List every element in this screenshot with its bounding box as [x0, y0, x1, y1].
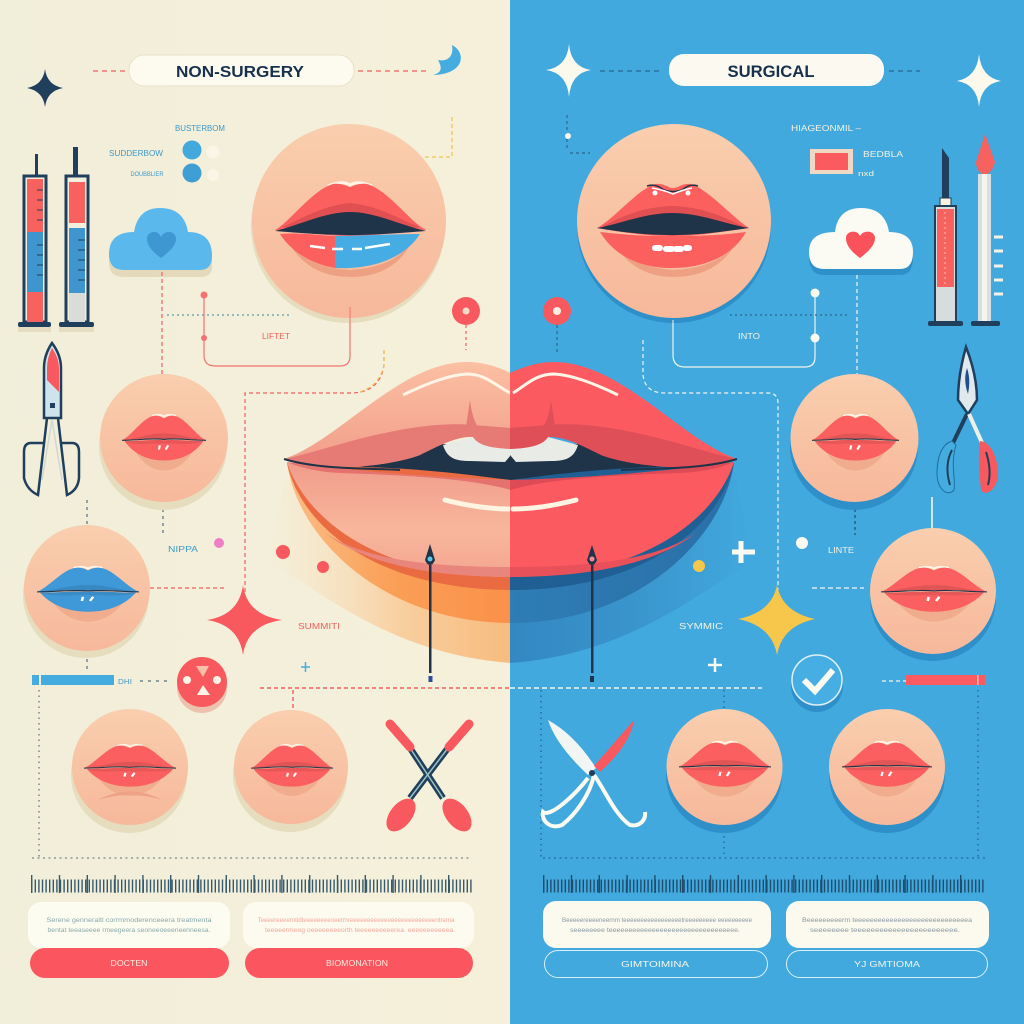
icon: crossed clamps left — [381, 724, 477, 837]
legend: non-surgery — [109, 124, 225, 182]
icon: yellow star right — [738, 585, 815, 655]
icon: blue cloud with heart — [109, 208, 212, 277]
button: non-surgery 1: DOCTEN — [110, 959, 148, 968]
scalpel: right — [971, 134, 1003, 326]
lips circle: bottom left 2 — [233, 710, 348, 832]
connectors: non-surgery — [39, 117, 510, 858]
legend: surgical: HIAGEONMIL – — [791, 124, 862, 133]
ruler: non-surgery — [31, 858, 472, 886]
legend: surgical: nxd — [858, 171, 874, 178]
button: surgical 2: YJ GMTIOMA — [854, 960, 921, 969]
card: non-surgery 2: Teeeereeeemtidteeeeeeeeoeetmreeeeeeeeeeeeeeeeeeeeeeeeentrema — [258, 917, 455, 924]
icon: white cloud with heart — [809, 208, 913, 275]
card: non-surgery 1: Serene genneraltl corrmmoderenceeera treatmenta — [46, 917, 212, 924]
button: surgical 1 — [544, 950, 768, 978]
labels: connector text — [168, 332, 854, 631]
labels: connector text: SUMMITI — [298, 622, 340, 631]
labels: connector text: SYMMIC — [679, 622, 723, 631]
labels: connector text: INTO — [738, 332, 760, 341]
card: non-surgery 1 — [28, 902, 230, 948]
icon: left scissors — [24, 343, 79, 495]
progress bar: non-surgery — [32, 675, 132, 686]
legend: non-surgery: SUDDERBOW — [109, 149, 163, 158]
icon: check badge — [791, 655, 843, 712]
legend: non-surgery: BUSTERBOM — [175, 124, 225, 133]
labels: connector text: LIFTET — [262, 332, 290, 341]
card: non-surgery 2 — [243, 902, 474, 948]
lips circle: bottom left 1 — [71, 709, 188, 833]
lips circle: blue lips — [23, 525, 150, 658]
syringe: left 2 — [59, 147, 94, 332]
needle left — [425, 544, 435, 682]
card: surgical 1 — [543, 901, 771, 948]
ruler: surgical — [543, 858, 985, 886]
connector pins: surgical — [565, 133, 820, 342]
button: non-surgery 2 — [245, 948, 473, 978]
syringe: right — [928, 148, 963, 326]
syringe: left 1 — [18, 154, 51, 332]
labels: connector text: LINTE — [828, 546, 854, 555]
main lips: non-surgery half — [268, 362, 511, 663]
card: surgical 2: seeeeeeee teeeeeeeeeeeeeeeeeeeeeeee. — [810, 927, 960, 934]
connectors: surgical — [510, 115, 978, 860]
main lips: surgical half — [510, 362, 753, 663]
card: surgical 1: Beeeeereeeeneernm teeeeeeeeeeeeeeeeetreeeeeeeee eeeeeeeeee — [562, 917, 752, 924]
icon: red star left — [207, 585, 282, 655]
icon: white star right — [957, 54, 1001, 107]
lips circle: right mid — [870, 528, 996, 661]
icon: red badge — [177, 657, 227, 713]
icon: red ring left — [452, 297, 480, 325]
button: surgical 1: GIMTOIMINA — [621, 960, 690, 969]
lips circle: bottom right 1 — [666, 709, 782, 833]
labels: connector text: NIPPA — [168, 545, 199, 554]
decorative dots — [214, 537, 808, 573]
progress bar: non-surgery: DHI — [118, 679, 132, 686]
icon: navy star — [27, 69, 63, 107]
lips circle: left upper — [99, 374, 228, 510]
card: non-surgery 2: teeeeermeeg oeeeeeeeeorth teeeeeeeeeerea. eeeeeeeeeeea. — [265, 927, 455, 934]
button: surgical 2 — [786, 950, 988, 978]
button: non-surgery 1 — [30, 948, 229, 978]
card: non-surgery 1: bentat teeaseeee rmeegeera seoneeoeeeneenneesa. — [48, 927, 211, 934]
needle right — [587, 545, 597, 682]
legend: surgical: BEDBLA — [863, 150, 904, 159]
icon: white star left — [546, 44, 591, 97]
connector pins: non-surgery — [200, 292, 208, 341]
legend: surgical — [791, 124, 904, 178]
progress bar: surgical — [906, 675, 985, 685]
icon: right scissors — [937, 347, 998, 493]
lips circle: right upper — [790, 374, 918, 510]
lips circle: bottom right 2 — [829, 709, 945, 833]
icon: blue crescent — [433, 45, 461, 75]
button: non-surgery 2: BIOMONATION — [326, 959, 388, 968]
header connector lines — [93, 70, 920, 72]
heading: non-surgery: NON-SURGERY — [176, 64, 304, 81]
heading: surgical — [669, 54, 884, 86]
icon: red ring right — [543, 297, 571, 325]
panel: surgical background — [510, 0, 1024, 1024]
lips circle: surgical top — [577, 124, 771, 330]
heading: non-surgery — [129, 55, 354, 86]
card: surgical 2: Beeeeeeeeerm teeeeeeeeeeeeeeeeeeeeeeeeeeeeea — [802, 917, 972, 924]
card: surgical 1: seeeeeeee teeeeeeeeeeeeeeeeeeeeeeeeeeeeeeeee. — [570, 927, 740, 934]
panel: non-surgery background — [0, 0, 510, 1024]
legend: non-surgery: DOUBBLIER — [130, 172, 164, 178]
icon: plus signs — [301, 541, 755, 672]
icon: scissors bottom right — [543, 720, 645, 826]
card: surgical 2 — [786, 901, 989, 948]
lips circle: non-surgery top — [251, 124, 446, 340]
heading: surgical: SURGICAL — [728, 62, 814, 81]
